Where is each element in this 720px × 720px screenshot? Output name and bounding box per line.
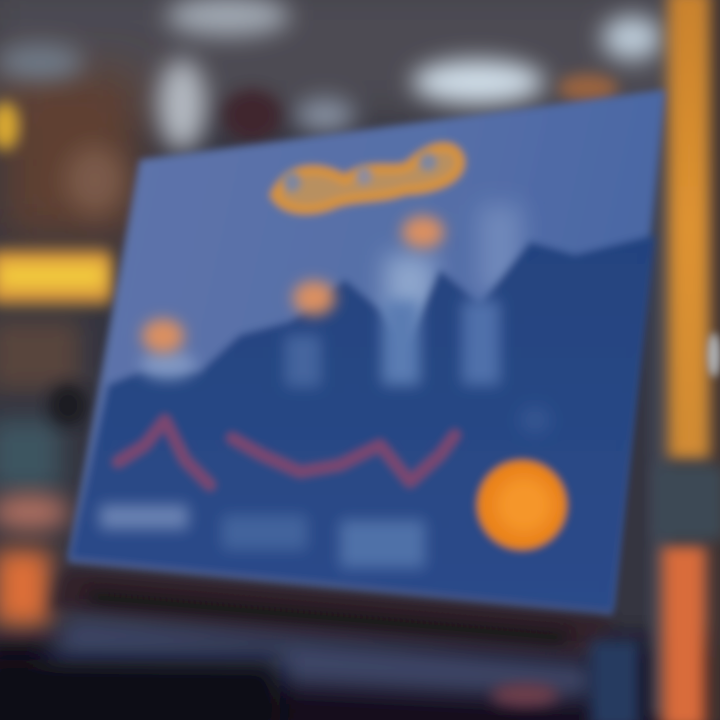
board base / dark ledge: [0, 568, 640, 720]
orange pillar: [655, 0, 720, 720]
dark figure and orange sign behind the board: [222, 74, 618, 141]
board panel: [68, 90, 665, 615]
caption blocks: [100, 505, 425, 568]
bar highlights: [385, 205, 522, 345]
orange circle: [477, 460, 567, 550]
red line chart: [118, 420, 455, 485]
orange title blob: [275, 147, 460, 209]
lighter columns: [140, 300, 553, 436]
skyline area chart: [70, 235, 655, 610]
ceiling lights: [0, 0, 662, 151]
orange data markers: [142, 216, 444, 353]
display board: [68, 90, 665, 615]
title gaps: [283, 153, 437, 192]
left glowing yellow signs: [0, 102, 112, 625]
